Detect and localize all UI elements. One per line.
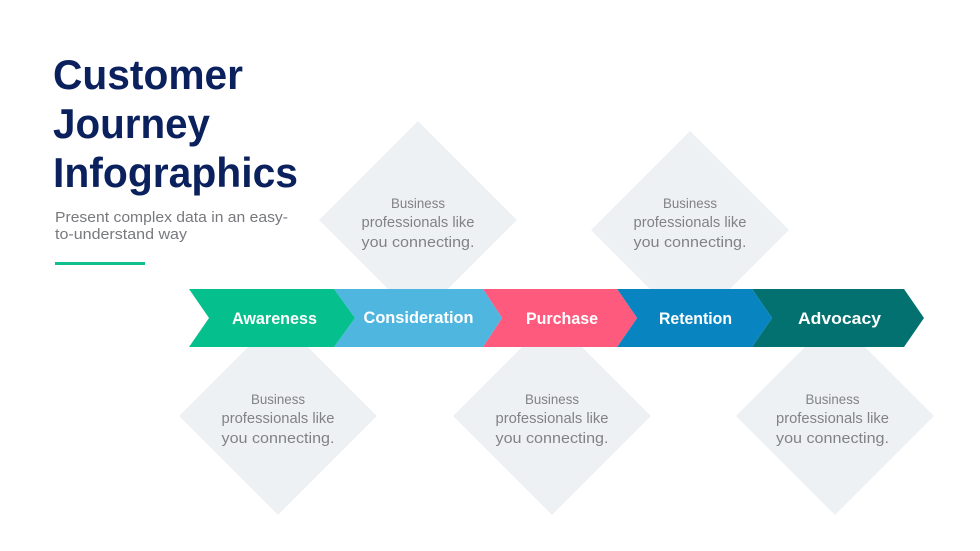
arrow: purchase [483,289,637,347]
arrow: consideration: Consideration [364,309,474,327]
panel: awareness note: professionals like [222,410,334,427]
panel: advocacy note: Business [806,391,860,407]
title: Infographics [53,149,298,196]
panel: consideration note: professionals like [362,214,474,231]
panel: awareness note: Business [251,391,305,407]
panel: consideration note: you connecting. [362,234,474,251]
arrow: retention [617,289,772,347]
panel: advocacy note: you connecting. [776,430,889,447]
panel: awareness note [179,317,377,515]
panel: purchase note [453,317,651,515]
accent line [55,262,145,265]
panel: retention note: you connecting. [634,234,746,251]
panel: purchase note: Business [525,391,579,407]
title [53,51,298,196]
panel: consideration note: Business [391,195,445,211]
panel: consideration note [319,121,517,319]
arrow: retention: Retention [659,310,732,328]
arrow: advocacy: Advocacy [798,310,882,328]
panel: purchase note: you connecting. [496,430,608,447]
panel: awareness note: you connecting. [222,430,334,447]
title: Customer [53,51,243,98]
panel: retention note: professionals like [634,214,746,231]
arrow: advocacy [752,289,924,347]
arrow: purchase: Purchase [526,310,598,328]
arrow: consideration [334,289,502,347]
panel: advocacy note: professionals like [776,410,889,427]
panel: advocacy note [736,317,934,515]
subtitle: to-understand way [55,226,188,243]
panel: purchase note: professionals like [496,410,608,427]
panel: retention note [591,131,789,329]
arrow: awareness: Awareness [232,310,317,328]
subtitle [55,209,288,243]
arrow: awareness [189,289,355,347]
subtitle: Present complex data in an easy- [55,209,288,226]
panel: retention note: Business [663,195,717,211]
title: Journey [53,100,211,147]
